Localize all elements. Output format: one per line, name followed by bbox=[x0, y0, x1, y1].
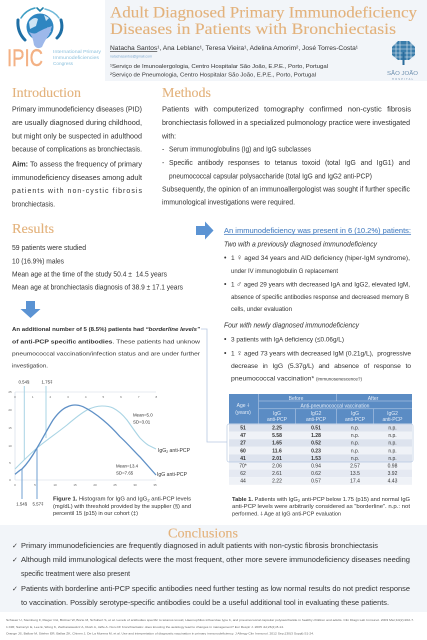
table rows vaccinated: 4.43 bbox=[388, 478, 398, 484]
table rows borderline: 0.52 bbox=[311, 441, 321, 447]
table header: Before bbox=[289, 396, 304, 402]
table header: After bbox=[368, 396, 379, 402]
table rows borderline: n.p. bbox=[351, 456, 359, 462]
text block: immunodeficiency details: Two with a previously diagnosed immunodeficiency bbox=[224, 242, 377, 248]
heading: Introduction: Introduction bbox=[12, 86, 81, 101]
text block: borderline levels: of anti-PCP specific antibodies . These patients had unknow bbox=[12, 340, 201, 346]
table rows vaccinated: 2.57 bbox=[350, 464, 360, 470]
top axis labels: 5 bbox=[102, 395, 104, 399]
table rows vaccinated: 44 bbox=[240, 478, 246, 484]
top axis labels: 2 bbox=[49, 395, 51, 399]
table rows borderline: n.p. bbox=[351, 426, 359, 432]
text block: immunodeficiency details: • bbox=[224, 350, 227, 358]
title: Diseases in Patients with Bronchiectasis bbox=[110, 21, 396, 38]
references: 1:436; Sarrazyn E, Lee E, Wong K, Zacharasiewicz A, Rush A, Jaffe A. Non-CF bronchiectasis: does knowing the aetiology lead to changes in management? Eur Respir J. 2005 Jul;26(1):8-14. bbox=[6, 625, 284, 629]
logo: IPIC congress bbox=[7, 8, 102, 72]
bracket around borderline rows bbox=[227, 424, 413, 462]
y axis labels bbox=[8, 390, 12, 482]
annotation: IgG2 mean: SD=3.01 bbox=[133, 420, 151, 424]
logo: Sao Joao hospital bbox=[387, 41, 419, 81]
table rows vaccinated: 0.62 bbox=[311, 471, 321, 477]
text block: methods: Patients with computerized tomography confirmed non-cystic fibrosis bbox=[162, 106, 412, 114]
label: IgG2 anti-PCP: anti-PCP bbox=[168, 448, 190, 454]
text block: immunodeficiency details: decrease in IgG (5.37g/L) and absence of response to bbox=[231, 363, 411, 370]
table rows vaccinated bbox=[239, 464, 398, 484]
table rows borderline: 2.25 bbox=[272, 426, 282, 432]
table caption: 2 bbox=[298, 499, 300, 503]
table rows vaccinated: 17.4 bbox=[350, 478, 360, 484]
table rows vaccinated: 13.5 bbox=[350, 471, 360, 477]
text block: results summary bbox=[12, 245, 183, 291]
top axis labels: 6 bbox=[120, 395, 122, 399]
conclusion bullet list: specific treatment were also present bbox=[21, 569, 130, 578]
table header: Anti-pneumococcal vaccination bbox=[301, 404, 370, 410]
table header: IgG2 bbox=[311, 411, 322, 417]
text block: introduction: Aim: To assess the frequency of primary bbox=[12, 162, 143, 168]
table rows borderline: 0.51 bbox=[311, 426, 321, 432]
arrow: right bbox=[196, 222, 214, 240]
y axis labels: 15 bbox=[8, 426, 12, 430]
figure caption: 2 bbox=[147, 498, 150, 502]
text block: immunodeficiency details: • bbox=[224, 282, 227, 288]
table rows vaccinated: 70* bbox=[239, 464, 247, 470]
text block: methods: with: bbox=[161, 133, 176, 140]
table rows vaccinated: 3.92 bbox=[388, 471, 398, 477]
table caption: Table 1. Patients with IgG bbox=[232, 497, 292, 503]
table header: anti-PCP bbox=[267, 417, 288, 423]
text block: introduction: are usually diagnosed during childhood, bbox=[12, 120, 142, 127]
bottom axis labels: 10 bbox=[53, 483, 57, 487]
logo name: SÃO JOÃO bbox=[387, 70, 419, 77]
text block: immunodeficiency details: Four with newly diagnosed immunodeficiency bbox=[224, 322, 359, 330]
figure caption: (mg/dL) with threshold provided by the supplier (§) and bbox=[53, 504, 191, 510]
bottom axis labels: 30 bbox=[133, 483, 137, 487]
threshold labels bottom: 1.54§ bbox=[16, 502, 28, 506]
table: patients with borderline levels bbox=[227, 394, 413, 485]
title: Adult Diagnosed Primary Immunodeficiency bbox=[110, 4, 417, 22]
text block: immunodeficiency details: • bbox=[224, 255, 227, 262]
text block: methods bbox=[161, 106, 412, 206]
text block: introduction: patients with non-cystic fibrosis bbox=[12, 188, 142, 195]
conclusion bullet list: Patients with borderline anti-PCP specific antibodies need further testing as low normal results do not predict response bbox=[21, 584, 410, 593]
table rows borderline: 1.53 bbox=[311, 456, 321, 462]
panel: conclusions bbox=[0, 525, 427, 612]
table rows vaccinated: 2.61 bbox=[272, 471, 282, 477]
logo caption: Congress bbox=[53, 61, 74, 66]
text block: immunodeficiency details: under IV immunoglobulin G replacement bbox=[231, 268, 338, 275]
text block: introduction bbox=[12, 106, 143, 208]
table rows borderline: n.p. bbox=[351, 441, 359, 447]
text block: immunodeficiency details: cells, under evaluation bbox=[231, 306, 292, 313]
table header: anti-PCP bbox=[306, 417, 327, 423]
y axis labels: 20 bbox=[8, 408, 12, 412]
y axis labels: 25 bbox=[8, 390, 12, 394]
text block: results summary: Mean age at bronchiectasis diagnosis of 38.9 ± 17.1 years bbox=[12, 284, 183, 291]
bottom axis labels: 25 bbox=[113, 483, 117, 487]
table rows borderline: n.p. bbox=[388, 426, 397, 432]
table rows borderline: n.p. bbox=[388, 441, 397, 447]
top axis labels: 0 bbox=[14, 395, 16, 399]
table rows borderline: 2.01 bbox=[272, 456, 282, 462]
text block: borderline levels: An additional number of 5 (8.5%) patients had “borderline levels” bbox=[12, 327, 200, 333]
references: Schauer U, Stemberg F, Rieger CH, Büttner W, Borte M, Schubert S, et al. Levels of antibodies specific to tetanus toxoid, Haemophilus influenzae type b, and pneumococcal capsular polysaccharide in healthy children and adults. Clin Diagn Lab Immunol. 2003 Mar;10(2):202-7. bbox=[6, 618, 414, 622]
arrow: down bbox=[20, 301, 40, 318]
bottom axis labels: 15 bbox=[73, 483, 77, 487]
chart axes bbox=[15, 392, 156, 480]
table header: (years) bbox=[235, 410, 251, 416]
table header: IgG bbox=[273, 411, 281, 417]
table rows vaccinated: 0.57 bbox=[311, 478, 321, 484]
figure caption: anti-PCP levels bbox=[150, 496, 192, 502]
text block: methods: bronchiectasis followed in a specialized pulmonology practice were investigated bbox=[162, 120, 410, 127]
icon: hand bbox=[29, 26, 52, 48]
conclusion bullet list: ✓ bbox=[12, 557, 18, 564]
text block: methods: - bbox=[162, 160, 165, 167]
table header: Age ⸸ bbox=[237, 403, 250, 409]
header band bbox=[105, 0, 427, 81]
table rows borderline: 27 bbox=[240, 441, 246, 447]
table rows borderline: n.p. bbox=[388, 433, 397, 439]
annotation: IgG mean: Mean=13.4 bbox=[116, 464, 139, 468]
text block: introduction: but might only be suspected in adulthood bbox=[12, 133, 142, 140]
threshold labels top: 1.75‡ bbox=[42, 380, 53, 384]
heading: Methods: Methods bbox=[162, 86, 211, 101]
table caption: anti-PCP below 1.75 (p15) and normal IgG bbox=[300, 497, 410, 503]
table header: anti-PCP bbox=[382, 417, 403, 423]
threshold lines IgG bbox=[22, 448, 37, 499]
table rows borderline: 1.28 bbox=[311, 433, 321, 439]
table rows borderline: 1.65 bbox=[272, 441, 282, 447]
curve: IgG2 anti-PCP bbox=[15, 406, 156, 469]
y axis labels: 0 bbox=[9, 478, 11, 482]
table rows borderline: 0.23 bbox=[311, 448, 321, 454]
heading: Conclusions: Conclusions bbox=[168, 526, 238, 542]
table header: IgG2 bbox=[387, 411, 398, 417]
title bbox=[110, 4, 417, 38]
affiliations: ²Serviço de Pneumologia, Centro Hospitalar São João, E.P.E., Porto, Portugal bbox=[110, 72, 316, 78]
conclusion bullet list: to vaccination. Possibly serotype-specific antibodies could be a useful additional tool in evaluating these patients. bbox=[21, 598, 389, 607]
threshold labels top: 0.54§ bbox=[18, 380, 30, 384]
table rows vaccinated: 2.06 bbox=[272, 464, 282, 470]
text block: immunodeficiency details: 1 ♀ aged 73 years with decreased IgM (0.21g/L), progressive bbox=[231, 348, 411, 358]
table header: IgG bbox=[351, 411, 359, 417]
text block: immunodeficiency details: 1 ♂ aged 29 years with decreased IgA and IgG2, elevated IgM, bbox=[231, 280, 410, 288]
logo wordmark: IPIC bbox=[7, 45, 43, 72]
heading: immunodeficiency present: An immunodeficiency was present in 6 (10.2%) patients: bbox=[224, 226, 411, 235]
text block: immunodeficiency details: 1 ♀ aged 34 years and AID deficiency (hiper-IgM syndrome), bbox=[231, 253, 410, 262]
references: Orange JS, Ballow M, Stiehm ER, Ballas ZK, Chinen J, De La Morena M, et al. Use and interpretation of diagnostic vaccination in primary immunodeficiency. J Allergy Clin Immunol. 2012 Sep;130(3 Suppl):S1-24. bbox=[6, 632, 314, 636]
text block: immunodeficiency details: pneumococcal vaccination* (immunosenescence?) bbox=[231, 376, 362, 382]
text block: borderline levels: investigation. bbox=[12, 364, 48, 370]
table caption bbox=[232, 497, 411, 518]
figure caption: Figure 1. Histogram for IgG and IgG bbox=[53, 496, 137, 502]
bottom axis labels bbox=[14, 483, 157, 487]
logo caption: Immunodeficiencies bbox=[53, 55, 100, 60]
conclusion bullet list bbox=[12, 541, 410, 607]
bottom axis labels: 0 bbox=[14, 483, 16, 487]
table rows borderline: 5.58 bbox=[272, 433, 282, 439]
table caption: performed. ⸸ Age at IgG anti-PCP evaluation bbox=[232, 512, 341, 518]
text block: borderline levels: pneumococcal vaccination/infection status and are under further bbox=[12, 352, 200, 358]
table rows vaccinated: 62 bbox=[240, 471, 246, 477]
label: IgG2 anti-PCP: 2 bbox=[166, 450, 168, 454]
label: IgG2 anti-PCP: IgG bbox=[158, 448, 167, 454]
table rows borderline: n.p. bbox=[388, 448, 397, 454]
top axis labels: 1 bbox=[32, 395, 34, 399]
table rows borderline: 47 bbox=[240, 433, 246, 439]
table rows borderline: 41 bbox=[240, 456, 246, 462]
table rows borderline: 11.6 bbox=[272, 448, 282, 454]
text block: introduction: Primary immunodeficiency diseases (PID) bbox=[12, 106, 142, 114]
bottom axis labels: 35 bbox=[153, 483, 157, 487]
annotation: IgG2 mean bbox=[133, 412, 153, 424]
table rows borderline: 51 bbox=[240, 426, 246, 432]
table caption: anti-PCP levels were arbitrarily considered as “borderline”. n.p.: not bbox=[232, 504, 411, 510]
table header bbox=[229, 394, 412, 424]
table rows vaccinated: 0.94 bbox=[311, 464, 321, 470]
text block: borderline levels bbox=[12, 327, 201, 370]
logo subtitle: HOSPITAL bbox=[392, 78, 414, 81]
text block: results summary: 59 patients were studied bbox=[12, 245, 86, 252]
icon: ring of people bbox=[18, 8, 62, 40]
text block: methods: immunological investigations were required. bbox=[162, 200, 295, 206]
text block: methods: Subsequently, the opinion of an immunoallergologist was sought if further specific bbox=[162, 186, 410, 194]
table rows borderline bbox=[240, 426, 397, 462]
annotation: IgG2 mean: Mean=5.0 bbox=[133, 412, 153, 418]
threshold labels bottom bbox=[16, 502, 44, 506]
logo caption: International Primary bbox=[53, 49, 102, 54]
top axis labels bbox=[14, 395, 157, 399]
table rows borderline: 60 bbox=[240, 448, 246, 454]
threshold lines IgG2 bbox=[24, 386, 46, 460]
table rows vaccinated: 2.22 bbox=[272, 478, 282, 484]
references bbox=[6, 618, 414, 636]
authors bbox=[110, 45, 358, 58]
annotation: IgG mean bbox=[116, 464, 139, 476]
text block: immunodeficiency details: absence of specific antibodies response and decreased memory B bbox=[231, 294, 409, 301]
table rows borderline: n.p. bbox=[351, 448, 359, 454]
affiliations bbox=[110, 64, 328, 78]
conclusion bullet list: Although mild immunological defects were the most frequent, other more severe immunodeficiency diseases needing bbox=[21, 555, 410, 564]
table rows vaccinated: 0.98 bbox=[388, 464, 398, 470]
label: IgG anti-PCP: IgG anti-PCP bbox=[157, 472, 187, 478]
text block: methods: - bbox=[162, 146, 165, 154]
icon: tree bbox=[392, 41, 415, 65]
text block: introduction: immunodeficiency diseases among adult bbox=[12, 175, 142, 182]
text block: results summary: 10 (16.9%) males bbox=[12, 258, 64, 265]
figure caption: percentil 15 (p15) in our cohort (‡) bbox=[53, 511, 138, 517]
top axis labels: 7 bbox=[138, 395, 140, 399]
text block: methods: Serum immunoglobulins (Ig) and IgG subclasses bbox=[169, 146, 311, 154]
text block: results summary: Mean age at the time of the study 50.4 ± 14.5 years bbox=[12, 271, 167, 278]
top axis labels: 4 bbox=[85, 395, 87, 399]
y axis labels: 10 bbox=[8, 444, 12, 448]
affiliations: ¹Serviço de Imunoalergologia, Centro Hospitalar São João, E.P.E., Porto, Portugal bbox=[110, 64, 328, 70]
table header: anti-PCP bbox=[345, 417, 366, 423]
heading: Results: Results bbox=[12, 222, 54, 237]
authors: natachasantos@gmail.com bbox=[110, 54, 152, 58]
bottom axis labels: 5 bbox=[34, 483, 36, 487]
text block: introduction: because of complications as bronchiectasis. bbox=[12, 146, 142, 154]
top axis labels: 3 bbox=[67, 395, 69, 399]
text block: immunodeficiency details: • bbox=[224, 336, 227, 344]
threshold labels top bbox=[18, 380, 53, 384]
y axis labels: 5 bbox=[9, 461, 11, 465]
conclusion bullet list: ✓ bbox=[12, 586, 18, 593]
figure caption bbox=[53, 496, 192, 517]
chart: histogram of IgG and IgG2 anti-PCP bbox=[8, 380, 190, 506]
text block: introduction: bronchiectasis. bbox=[12, 201, 55, 208]
annotation: IgG mean: SD=7.65 bbox=[116, 470, 134, 476]
text block: immunodeficiency details bbox=[224, 242, 411, 382]
conclusion bullet list: Primary immunodeficiencies are frequently diagnosed in adult patients with non-cystic fibrosis bronchiectasis bbox=[21, 541, 378, 550]
bottom axis labels: 20 bbox=[93, 483, 97, 487]
authors: Natacha Santos ¹, Ana Leblanc¹, Teresa Vieira¹, Adelina Amorim², José Torres-Costa¹ bbox=[110, 45, 358, 52]
table row backgrounds bbox=[229, 424, 412, 485]
conclusion bullet list: ✓ bbox=[12, 543, 18, 550]
table rows borderline: n.p. bbox=[351, 433, 359, 439]
text block: methods: pneumococcal capsular polysaccharide (total IgG and IgG2 anti-PCP) bbox=[169, 173, 372, 180]
threshold labels bottom: 5.57‡ bbox=[32, 502, 44, 506]
icon: globe bbox=[26, 14, 54, 40]
curve: IgG anti-PCP bbox=[15, 405, 156, 475]
bracket connector bbox=[201, 329, 227, 442]
text block: methods: Specific antibody responses to tetanus toxoid (total IgG and IgG1) and bbox=[169, 160, 410, 167]
logo caption bbox=[53, 49, 102, 66]
table rows borderline: n.p. bbox=[388, 456, 397, 462]
top axis labels: 8 bbox=[155, 395, 157, 399]
text block: immunodeficiency details: 3 patients with IgA deficiency (≤0.06g/L) bbox=[231, 336, 344, 344]
